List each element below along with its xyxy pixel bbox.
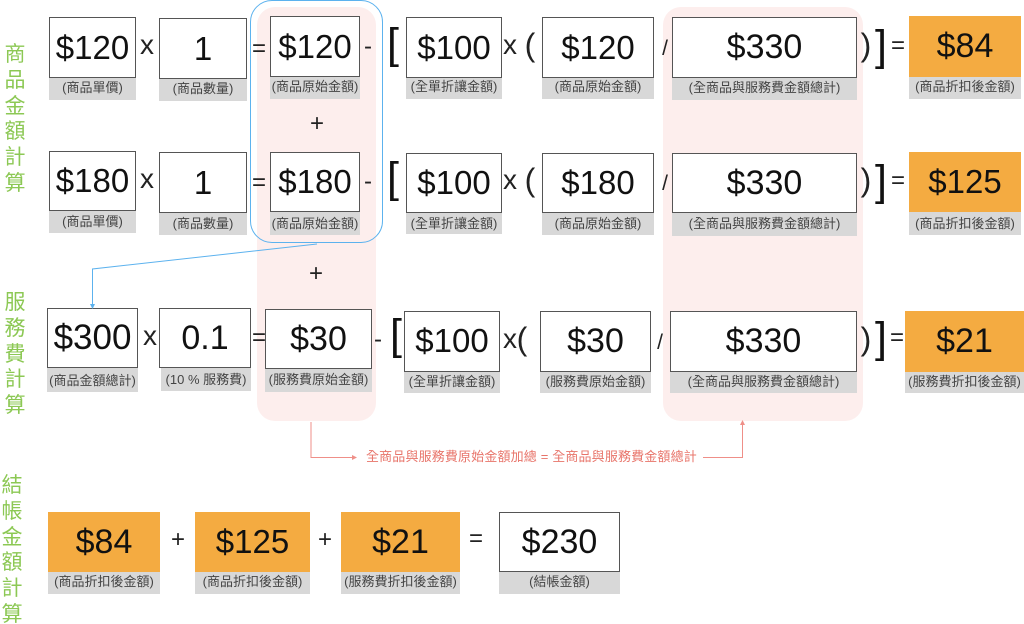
order discount xyxy=(406,17,502,99)
heading: checkout amount calculation xyxy=(2,474,22,624)
formula row: service fee xyxy=(47,308,1024,393)
grand total: (全商品與服務費金額總計) xyxy=(689,80,840,95)
heading: service fee calculation: 服 xyxy=(4,291,26,314)
heading: checkout amount calculation: 金 xyxy=(2,526,22,549)
service discounted xyxy=(341,512,460,594)
heading: checkout amount calculation: 結 xyxy=(2,474,22,497)
grand total: (全商品與服務費金額總計) xyxy=(689,216,840,231)
quantity: (商品數量) xyxy=(173,81,233,96)
service original amount: (服務費原始金額) xyxy=(269,372,368,387)
order discount: $100 xyxy=(417,164,491,201)
multiply sign: x xyxy=(140,29,154,60)
grand total: (全商品與服務費金額總計) xyxy=(688,374,839,389)
opening parenthesis: ( xyxy=(525,27,535,63)
heading: service fee calculation: 務 xyxy=(4,317,26,340)
minus sign: - xyxy=(364,168,372,195)
multiply sign: x xyxy=(140,163,154,194)
grand total: $330 xyxy=(726,322,801,360)
heading: product amount calculation: 商 xyxy=(4,43,26,66)
equals sign: = xyxy=(252,324,266,351)
plus before service fee: + xyxy=(309,260,323,287)
product total: (商品金額總計) xyxy=(49,373,136,388)
heading: product amount calculation: 金 xyxy=(4,95,26,118)
grand total xyxy=(672,17,857,100)
equals sign: = xyxy=(252,35,266,62)
callout text: 全商品與服務費原始金額加總 = 全商品與服務費金額總計 xyxy=(366,449,697,464)
heading: service fee calculation: 費 xyxy=(4,343,26,366)
checkout amount: $230 xyxy=(522,523,597,561)
original amount: (商品原始金額) xyxy=(272,216,358,231)
order discount xyxy=(406,153,502,234)
division sign: / xyxy=(657,331,663,354)
order discount: (全單折讓金額) xyxy=(411,79,497,94)
order discount: $100 xyxy=(415,322,489,359)
multiply sign: x xyxy=(503,164,517,195)
order discount: $100 xyxy=(417,29,491,66)
service rate: 0.1 xyxy=(181,319,229,357)
heading: checkout amount calculation: 額 xyxy=(2,551,22,574)
equals sign: = xyxy=(469,525,483,552)
heading: service fee calculation: 算 xyxy=(4,394,26,417)
opening parenthesis: ( xyxy=(517,321,527,357)
service original amount: $30 xyxy=(567,322,624,360)
opening bracket: [ xyxy=(390,311,402,359)
original amount: (商品原始金額) xyxy=(272,79,358,94)
closing parenthesis: ) xyxy=(861,321,871,357)
discounted amount: (商品折扣後金額) xyxy=(915,216,1015,231)
discounted amount xyxy=(909,152,1021,235)
product total: $300 xyxy=(54,318,131,357)
closing bracket: ] xyxy=(875,157,887,205)
product original amount: $120 xyxy=(561,29,635,66)
product original amount xyxy=(542,17,654,99)
grand total xyxy=(670,311,857,393)
heading: product amount calculation: 計 xyxy=(4,146,26,169)
division sign: / xyxy=(662,172,668,195)
product original amount: $180 xyxy=(561,164,635,201)
heading: product amount calculation: 品 xyxy=(4,69,26,92)
discounted amount: $125 xyxy=(928,163,1002,200)
original amount: $120 xyxy=(278,28,352,65)
equals sign: = xyxy=(891,32,905,59)
multiply sign: x xyxy=(503,323,517,354)
product two discounted: (商品折扣後金額) xyxy=(203,574,302,589)
discounted amount xyxy=(905,311,1024,393)
panel: original amounts highlight xyxy=(257,7,376,421)
product one discounted: $84 xyxy=(76,523,132,561)
equals sign: = xyxy=(890,324,904,351)
product original amount xyxy=(542,153,654,235)
closing bracket: ] xyxy=(875,22,887,70)
service original amount xyxy=(265,309,372,392)
arrow: product total to service fee base xyxy=(90,244,317,309)
closing bracket: ] xyxy=(875,314,887,362)
order discount: (全單折讓金額) xyxy=(409,374,495,389)
quantity: (商品數量) xyxy=(173,216,233,231)
service original amount xyxy=(540,311,651,393)
heading: product amount calculation: 額 xyxy=(4,120,26,143)
minus sign: - xyxy=(374,326,382,353)
order discount xyxy=(404,311,500,393)
original amount xyxy=(270,152,360,235)
product one discounted xyxy=(48,512,160,594)
heading: product amount calculation xyxy=(4,43,26,195)
plus sign: + xyxy=(318,526,332,553)
service original amount: $30 xyxy=(290,320,347,358)
product one discounted: (商品折扣後金額) xyxy=(54,574,154,589)
service rate: (10 % 服務費) xyxy=(166,372,246,387)
service rate xyxy=(159,308,251,391)
heading: service fee calculation: 計 xyxy=(4,368,26,391)
product two discounted xyxy=(195,512,310,594)
arrow: from original amounts xyxy=(310,420,745,460)
panel: grand total highlight xyxy=(663,7,863,421)
opening bracket: [ xyxy=(387,20,399,68)
discounted amount xyxy=(909,16,1021,99)
grand total xyxy=(672,153,857,236)
heading: service fee calculation xyxy=(4,291,26,417)
unit price: $180 xyxy=(56,162,129,199)
heading: checkout amount calculation: 計 xyxy=(2,577,22,600)
multiply sign: x xyxy=(143,320,157,351)
plus between products: + xyxy=(310,110,324,137)
checkout amount xyxy=(499,512,620,594)
heading: product amount calculation: 算 xyxy=(4,172,26,195)
service original amount: (服務費原始金額) xyxy=(546,374,645,389)
callout: original amounts sum equals grand total xyxy=(310,420,745,464)
opening bracket: [ xyxy=(387,154,399,202)
grand total: $330 xyxy=(727,164,802,202)
discounted amount: $21 xyxy=(936,322,993,360)
unit price xyxy=(49,151,136,233)
formula row: checkout total xyxy=(48,512,620,594)
quantity: 1 xyxy=(194,30,212,67)
product total xyxy=(47,308,138,392)
service discounted: (服務費折扣後金額) xyxy=(344,574,457,589)
quantity: 1 xyxy=(194,164,212,201)
grand total: $330 xyxy=(727,28,802,66)
formula row: second product xyxy=(49,151,1021,236)
service discounted: $21 xyxy=(372,523,429,561)
heading: checkout amount calculation: 帳 xyxy=(2,500,22,523)
product original amount: (商品原始金額) xyxy=(555,79,641,94)
original amount xyxy=(270,16,360,99)
original amount: $180 xyxy=(278,163,352,200)
discounted amount: (服務費折扣後金額) xyxy=(908,374,1021,389)
equals sign: = xyxy=(252,169,266,196)
opening parenthesis: ( xyxy=(525,162,535,198)
quantity xyxy=(159,152,247,235)
discounted amount: $84 xyxy=(937,27,993,65)
multiply sign: x xyxy=(503,29,517,60)
closing parenthesis: ) xyxy=(861,162,871,198)
unit price: (商品單價) xyxy=(62,214,123,229)
plus sign: + xyxy=(171,526,185,553)
panel: product subtotal outline xyxy=(250,0,383,243)
closing parenthesis: ) xyxy=(861,27,871,63)
unit price xyxy=(49,17,136,100)
order discount: (全單折讓金額) xyxy=(411,216,497,231)
checkout amount: (結帳金額) xyxy=(529,574,590,589)
minus sign: - xyxy=(364,33,372,60)
unit price: $120 xyxy=(56,29,129,66)
product original amount: (商品原始金額) xyxy=(555,216,641,231)
formula row: first product xyxy=(49,16,1021,101)
quantity xyxy=(159,18,247,101)
division sign: / xyxy=(662,37,668,60)
equals sign: = xyxy=(891,167,905,194)
discounted amount: (商品折扣後金額) xyxy=(915,79,1015,94)
product two discounted: $125 xyxy=(216,523,289,560)
unit price: (商品單價) xyxy=(62,80,123,95)
